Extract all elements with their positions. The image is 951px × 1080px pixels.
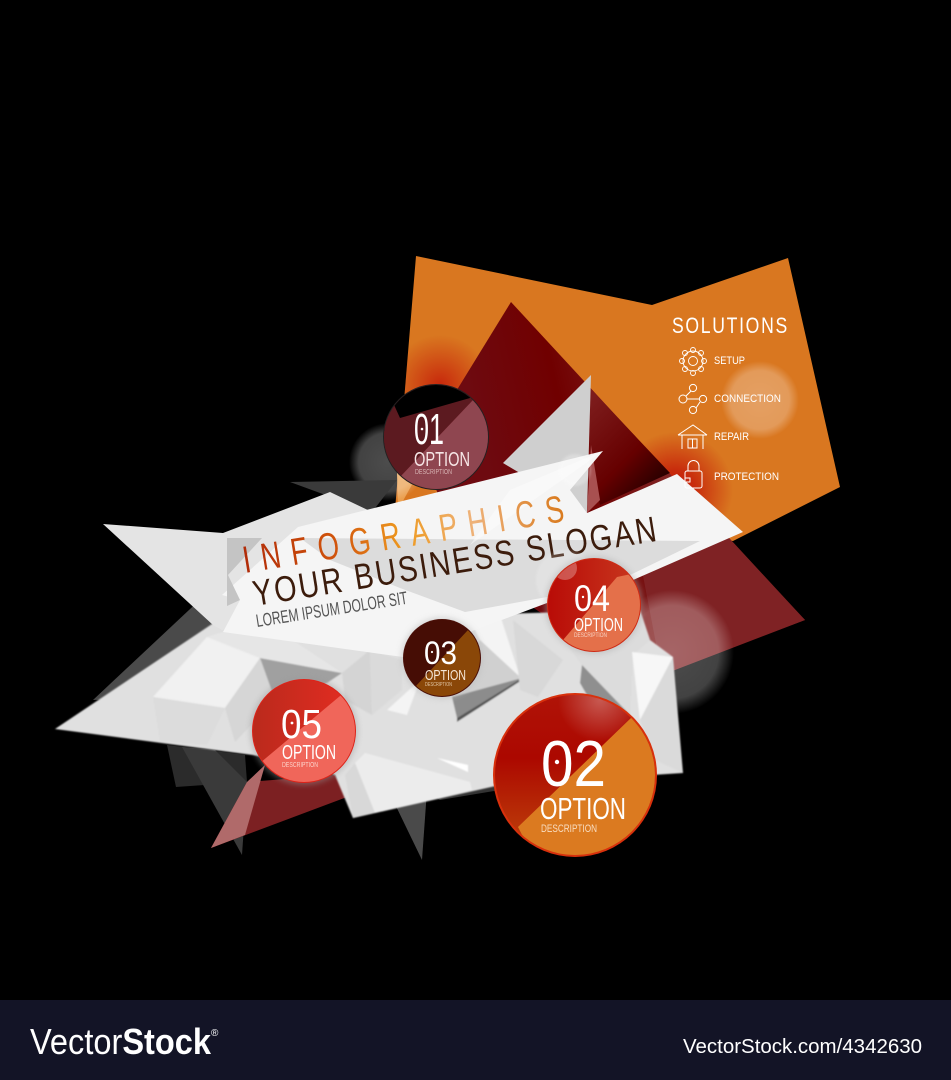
option 01 badge	[383, 384, 489, 490]
dark top spike	[290, 480, 397, 512]
label: connection: CONNECTION	[714, 393, 781, 405]
footer logo: VectorStock	[30, 1021, 212, 1062]
number dot 05	[291, 722, 293, 724]
white banner	[222, 451, 743, 657]
lower red triangle	[211, 765, 347, 848]
option 04 badge	[545, 556, 650, 660]
description 01: DESCRIPTION	[415, 469, 452, 476]
option text 02: OPTION	[540, 791, 626, 826]
option text 05: OPTION	[282, 742, 336, 764]
soft light circles on banner	[536, 454, 596, 610]
number 05: 05	[281, 701, 322, 747]
subheading: lorem ipsum: LOREM IPSUM DOLOR SIT	[255, 588, 409, 631]
lower right translucent red band	[640, 530, 805, 675]
label: protection: PROTECTION	[714, 471, 779, 483]
icon: house	[678, 425, 707, 449]
description 02: DESCRIPTION	[541, 823, 597, 835]
number dot 02	[555, 760, 559, 764]
soft light circle behind option 01	[349, 423, 427, 501]
registered mark: ®	[211, 1028, 219, 1039]
soft light circle on orange	[721, 361, 799, 439]
grey left wing banner	[103, 478, 510, 630]
footer image id: VectorStock.com/4342630	[683, 1036, 922, 1058]
panel: orange solutions sheet	[395, 256, 840, 541]
number dot 03	[431, 651, 433, 653]
number 03: 03	[424, 635, 457, 671]
description 05: DESCRIPTION	[282, 762, 318, 769]
soft light circle over red band	[610, 590, 734, 714]
dark red shaded area right of the grey triangle	[590, 388, 670, 505]
option 03 badge	[400, 616, 484, 700]
title: infographics: INFOGRAPHICS	[240, 488, 567, 582]
crumpled white body	[55, 610, 683, 818]
icon: connection	[679, 384, 707, 414]
white highlight flare	[470, 451, 603, 545]
grey shaded band behind title	[227, 538, 700, 612]
label: setup: SETUP	[714, 355, 745, 367]
number dot 04	[582, 596, 584, 598]
grey upper triangle	[503, 375, 591, 513]
option 02 badge	[493, 693, 657, 857]
dark red triangle	[420, 302, 805, 682]
footer band	[0, 1000, 951, 1080]
option text 03: OPTION	[425, 667, 466, 684]
option text 01: OPTION	[414, 449, 470, 471]
number 04: 04	[574, 578, 610, 619]
solutions heading: SOLUTIONS	[672, 314, 787, 339]
icon: lock	[685, 460, 702, 488]
number 01: 01	[414, 405, 444, 454]
option 05 badge	[250, 677, 360, 790]
dark translucent spikes	[93, 595, 677, 860]
number 02: 02	[541, 727, 606, 800]
infographic canvas	[0, 256, 951, 1080]
dark sliver beside grey triangle	[587, 445, 600, 513]
number dot 01	[421, 428, 423, 430]
icon: gear	[680, 348, 706, 376]
label: repair: REPAIR	[714, 431, 749, 443]
description 04: DESCRIPTION	[574, 633, 607, 639]
description 03: DESCRIPTION	[425, 682, 452, 688]
heading: your business slogan: YOUR BUSINESS SLOGAN	[250, 508, 659, 614]
option text 04: OPTION	[574, 615, 623, 635]
